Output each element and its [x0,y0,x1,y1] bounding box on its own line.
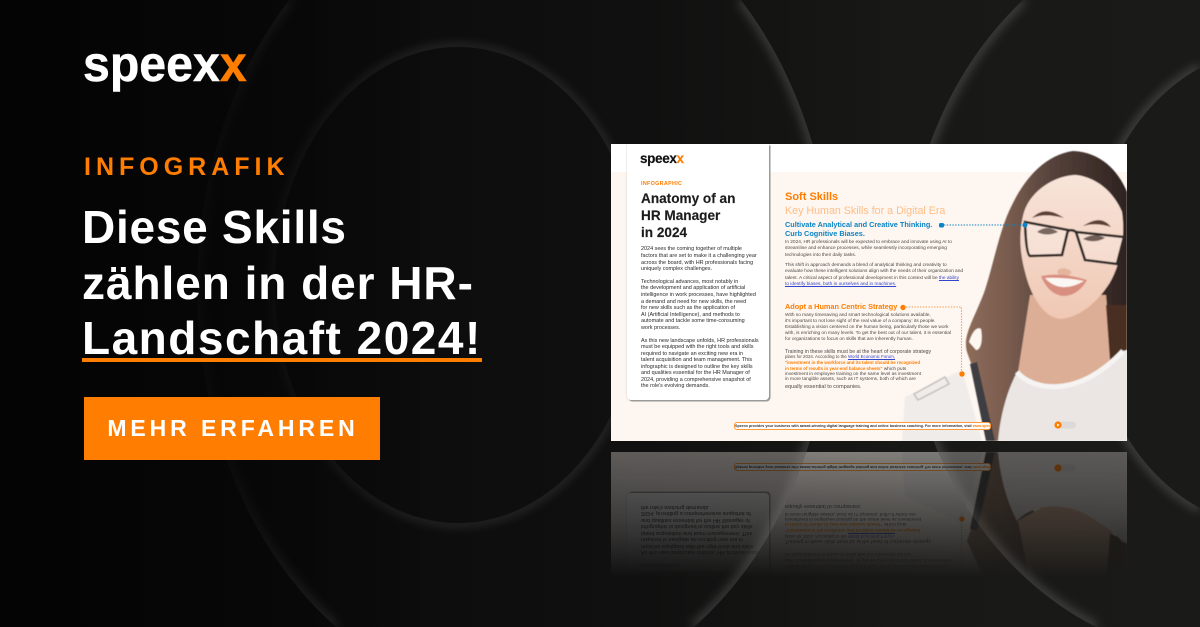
reflection of document: must be equipped with the right tools and skills [641,543,753,549]
section body: cultivate [785,240,963,287]
reflected card [629,492,770,556]
card title: Anatomy of an [641,191,735,206]
card title [641,191,735,240]
panel: infographic document preview: "investment in the workforce and its talent should be recognized [785,360,920,365]
panel: infographic document preview: 2024, providing a comprehensive snapshot of [641,377,751,383]
reflection of document: 2024, providing a comprehensive snapshot of [641,510,751,516]
panel: infographic document preview: for organizations to focus on skills that are inherently human. [785,337,913,342]
title underline [82,358,482,362]
reflection of document: for organizations to focus on skills that are inherently human. [785,551,913,556]
panel: infographic document preview: AI (Artificial Intelligence), and methods to [641,312,740,318]
panel: infographic document preview: talent acquisition and team management. This [641,357,752,363]
panel: infographic document preview: technologies into their daily tasks. [785,253,856,258]
card kicker: INFOGRAPHIC [641,180,682,186]
section heading: cultivate: Cultivate Analytical and Creative Thinking. [785,220,932,229]
panel: infographic document preview: As this new landscape unfolds, HR professionals [641,338,759,344]
reflection of document: Establishing a vision centered on the human being, particularly those we work [785,563,948,568]
section heading: adopt a human centric strategy: Adopt a Human Centric Strategy [785,302,897,311]
panel: infographic document preview: uniquely complex challenges. [641,266,712,272]
section body: strategy [785,312,951,390]
reflection of document [611,452,1127,568]
title: Diese Skills [82,201,347,253]
panel: infographic document preview: and qualities essential for the HR Manager of [641,370,750,376]
panel: infographic document preview: to identify biases, both in ourselves and in machines. [785,282,896,286]
panel: infographic document preview: plans for 2024. According to the World Economic Forum, [785,354,895,359]
reflection of document: "investment in the workforce and its talent should be recognized [785,528,920,533]
reflection of document: in more tangible assets, such as IT systems, both of which are [785,511,916,516]
reflection of document: talent acquisition and team management. This [641,530,752,536]
panel: infographic document preview: in terms of results in year-end balance sheets" which puts [785,366,906,372]
reflected footer pill [734,463,991,471]
reflection of document: Training in these skills must be at the heart of corporate strategy [785,538,931,544]
panel: infographic document preview: factors that are set to make it a challenging year [641,253,757,259]
reflection of document: the role's evolving demands. [641,504,710,510]
reflection of document: work processes. [641,562,680,568]
card logo: speexx [640,151,684,166]
panel: intro card [627,144,769,400]
panel: infographic document preview: the role's evolving demands. [641,383,710,389]
reflection of document: automate and tackle some time-consuming [641,569,745,575]
photo: smiling woman with glasses [902,150,1127,441]
reflection of document: As this new landscape unfolds, HR professionals [641,549,759,555]
reflection of document: investment in employee training on the same level as investment [785,516,921,521]
panel: infographic document preview: infographic is designed to outline the key skills [641,364,753,370]
panel: infographic document preview: equally essential to companies. [785,384,861,390]
logo: speexx: speexx [83,36,247,92]
kicker: INFOGRAFIK: INFOGRAFIK [84,153,290,181]
panel: infographic document preview: with, is enriching on many levels. To get the best out of our talent, it is essential [785,331,951,336]
panel: infographic document preview: Establishing a vision centered on the human being, particularly those we work [785,325,948,330]
panel: infographic document preview: a demand and need for new skills, the need [641,298,746,304]
reflection of document: and qualities essential for the HR Manager of [641,517,750,523]
panel: infographic document preview: it's important to not lose sight of the real value of a company: its people. [785,319,936,324]
card title: HR Manager [641,208,720,223]
panel: infographic document preview: Technological advances, most notably in [641,279,738,285]
panel: infographic document preview: streamline and enhance processes, while seamlessly incorporating emerging [785,246,947,251]
panel: infographic document preview: across the board, with HR professionals facing [641,260,753,266]
panel: infographic document preview: automate and tackle some time-consuming [641,318,745,324]
callout: blue and orange dotted connectors [900,222,1076,429]
panel: infographic document preview: Training in these skills must be at the heart of corporate strategy [785,349,931,355]
panel: infographic document preview: the development and application of artificial [641,285,745,291]
footer note pill [734,422,991,430]
panel: infographic document preview [611,144,1127,441]
background: glowing rounded shapes [262,0,1200,627]
button: MEHR ERFAHREN [84,397,380,460]
panel: infographic document preview: work processes. [641,325,680,331]
heading: Soft Skills: Soft Skills [785,191,838,203]
panel: infographic document preview: talent. A critical aspect of professional development in this context will be the ability [785,276,959,280]
card title: in 2024 [641,225,687,240]
panel: infographic document preview: This shift in approach demands a blend of analytical thinking and creativity to [785,263,947,268]
panel: infographic document preview: must be equipped with the right tools and skills [641,344,753,350]
panel: infographic document preview: intelligence in work processes, have highlighted [641,292,756,298]
reflected card text [641,505,758,566]
panel: infographic document preview: investment in employee training on the same level as investment [785,372,921,377]
reflection shading from background shapes [611,452,1127,528]
section heading: cognitive biases: Curb Cognitive Biases. [785,228,865,238]
card body text [641,246,759,389]
panel: infographic document preview: In 2024, HR professionals will be expected to embrace and innovate using AI to [785,240,952,245]
panel: infographic document preview: With so many timesaving and smart technological solutions available, [785,313,931,318]
reflection of document: infographic is designed to outline the key skills [641,523,753,529]
panel: infographic document preview: 2024 sees the coming together of multiple [641,246,742,252]
reflection of document: plans for 2024. According to the World Economic Forum, [785,534,895,539]
reflected photo [959,452,1127,566]
button: MEHR ERFAHREN: MEHR ERFAHREN [107,415,359,441]
title [82,201,482,364]
reflected strategy text [785,504,950,562]
reflection of document: in terms of results in year-end balance sheets" which puts [785,521,906,527]
panel: infographic document preview: required to navigate an exciting new era in [641,351,743,357]
title: zählen in der HR- [82,256,474,308]
subheading: Key Human Skills: Key Human Skills for a Digital Era [785,205,945,217]
panel: infographic document preview: for new skills such as the application of [641,305,735,311]
panel: infographic document preview: in more tangible assets, such as IT systems, both of which are [785,377,916,382]
title: Landschaft 2024! [82,312,482,364]
reflection of document: required to navigate an exciting new era in [641,536,743,542]
reflection of document: with, is enriching on many levels. To get the best out of our talent, it is essential [785,557,951,562]
reflection of document: equally essential to companies. [785,503,861,509]
panel: infographic document preview: evaluate how these intelligent solutions align with the needs of their organization and [785,269,963,274]
